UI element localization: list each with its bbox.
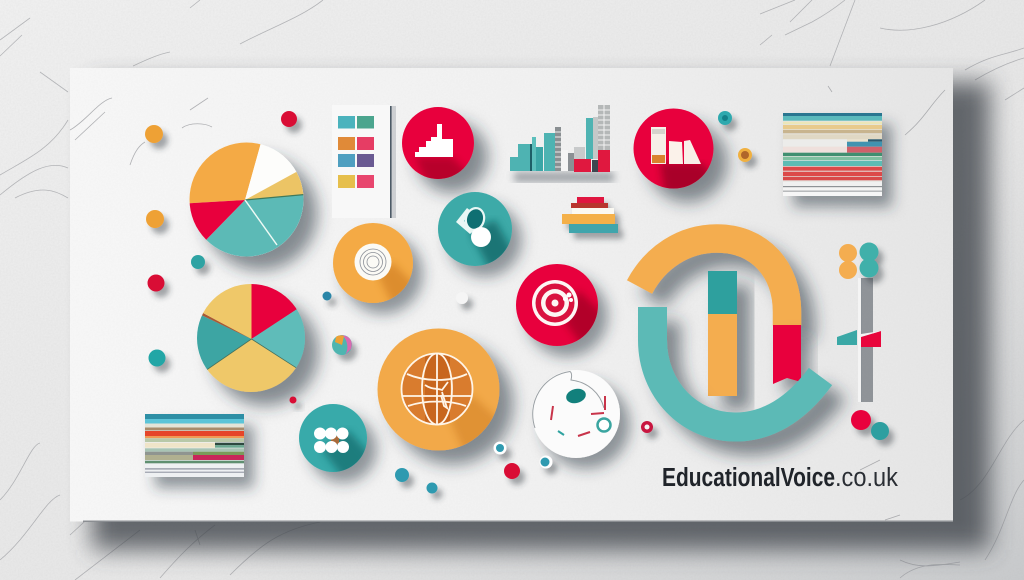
brand wordmark: .co.uk [835,464,898,492]
striped block: bottom left [145,414,244,477]
teal circle: lens icon [438,192,515,270]
white plate: circular flow [532,370,620,458]
mini skyline bar chart [510,105,614,182]
pie chart: top left [190,142,329,282]
brand wordmark: EducationalVoice [662,464,835,492]
teal circle: six white dots [299,404,375,480]
red circle: bars icon [634,108,725,195]
ring chart: central column [708,271,737,396]
ring chart: orange arc [640,238,787,326]
red circle: target icon [516,264,610,350]
small dots: bottom centre [395,421,653,494]
striped block: top right [783,113,882,196]
ring chart: teal arc [652,307,820,427]
ring chart: red ribbon end [773,325,801,384]
ring dots: top right [718,111,752,162]
white presentation panel [70,68,953,522]
large ring chart [640,238,820,427]
decorative marker dots: left column [145,111,468,404]
panel drop shadow [92,82,990,550]
red circle: factory icon [402,107,480,190]
orange circle: globe [378,328,510,465]
stacked layers icon [562,197,618,233]
swatch card [332,105,396,218]
orange circle: white dial [333,223,420,310]
pin with dots and flag [837,242,889,440]
striped ball [332,335,352,355]
pie chart: lower left [197,284,330,418]
